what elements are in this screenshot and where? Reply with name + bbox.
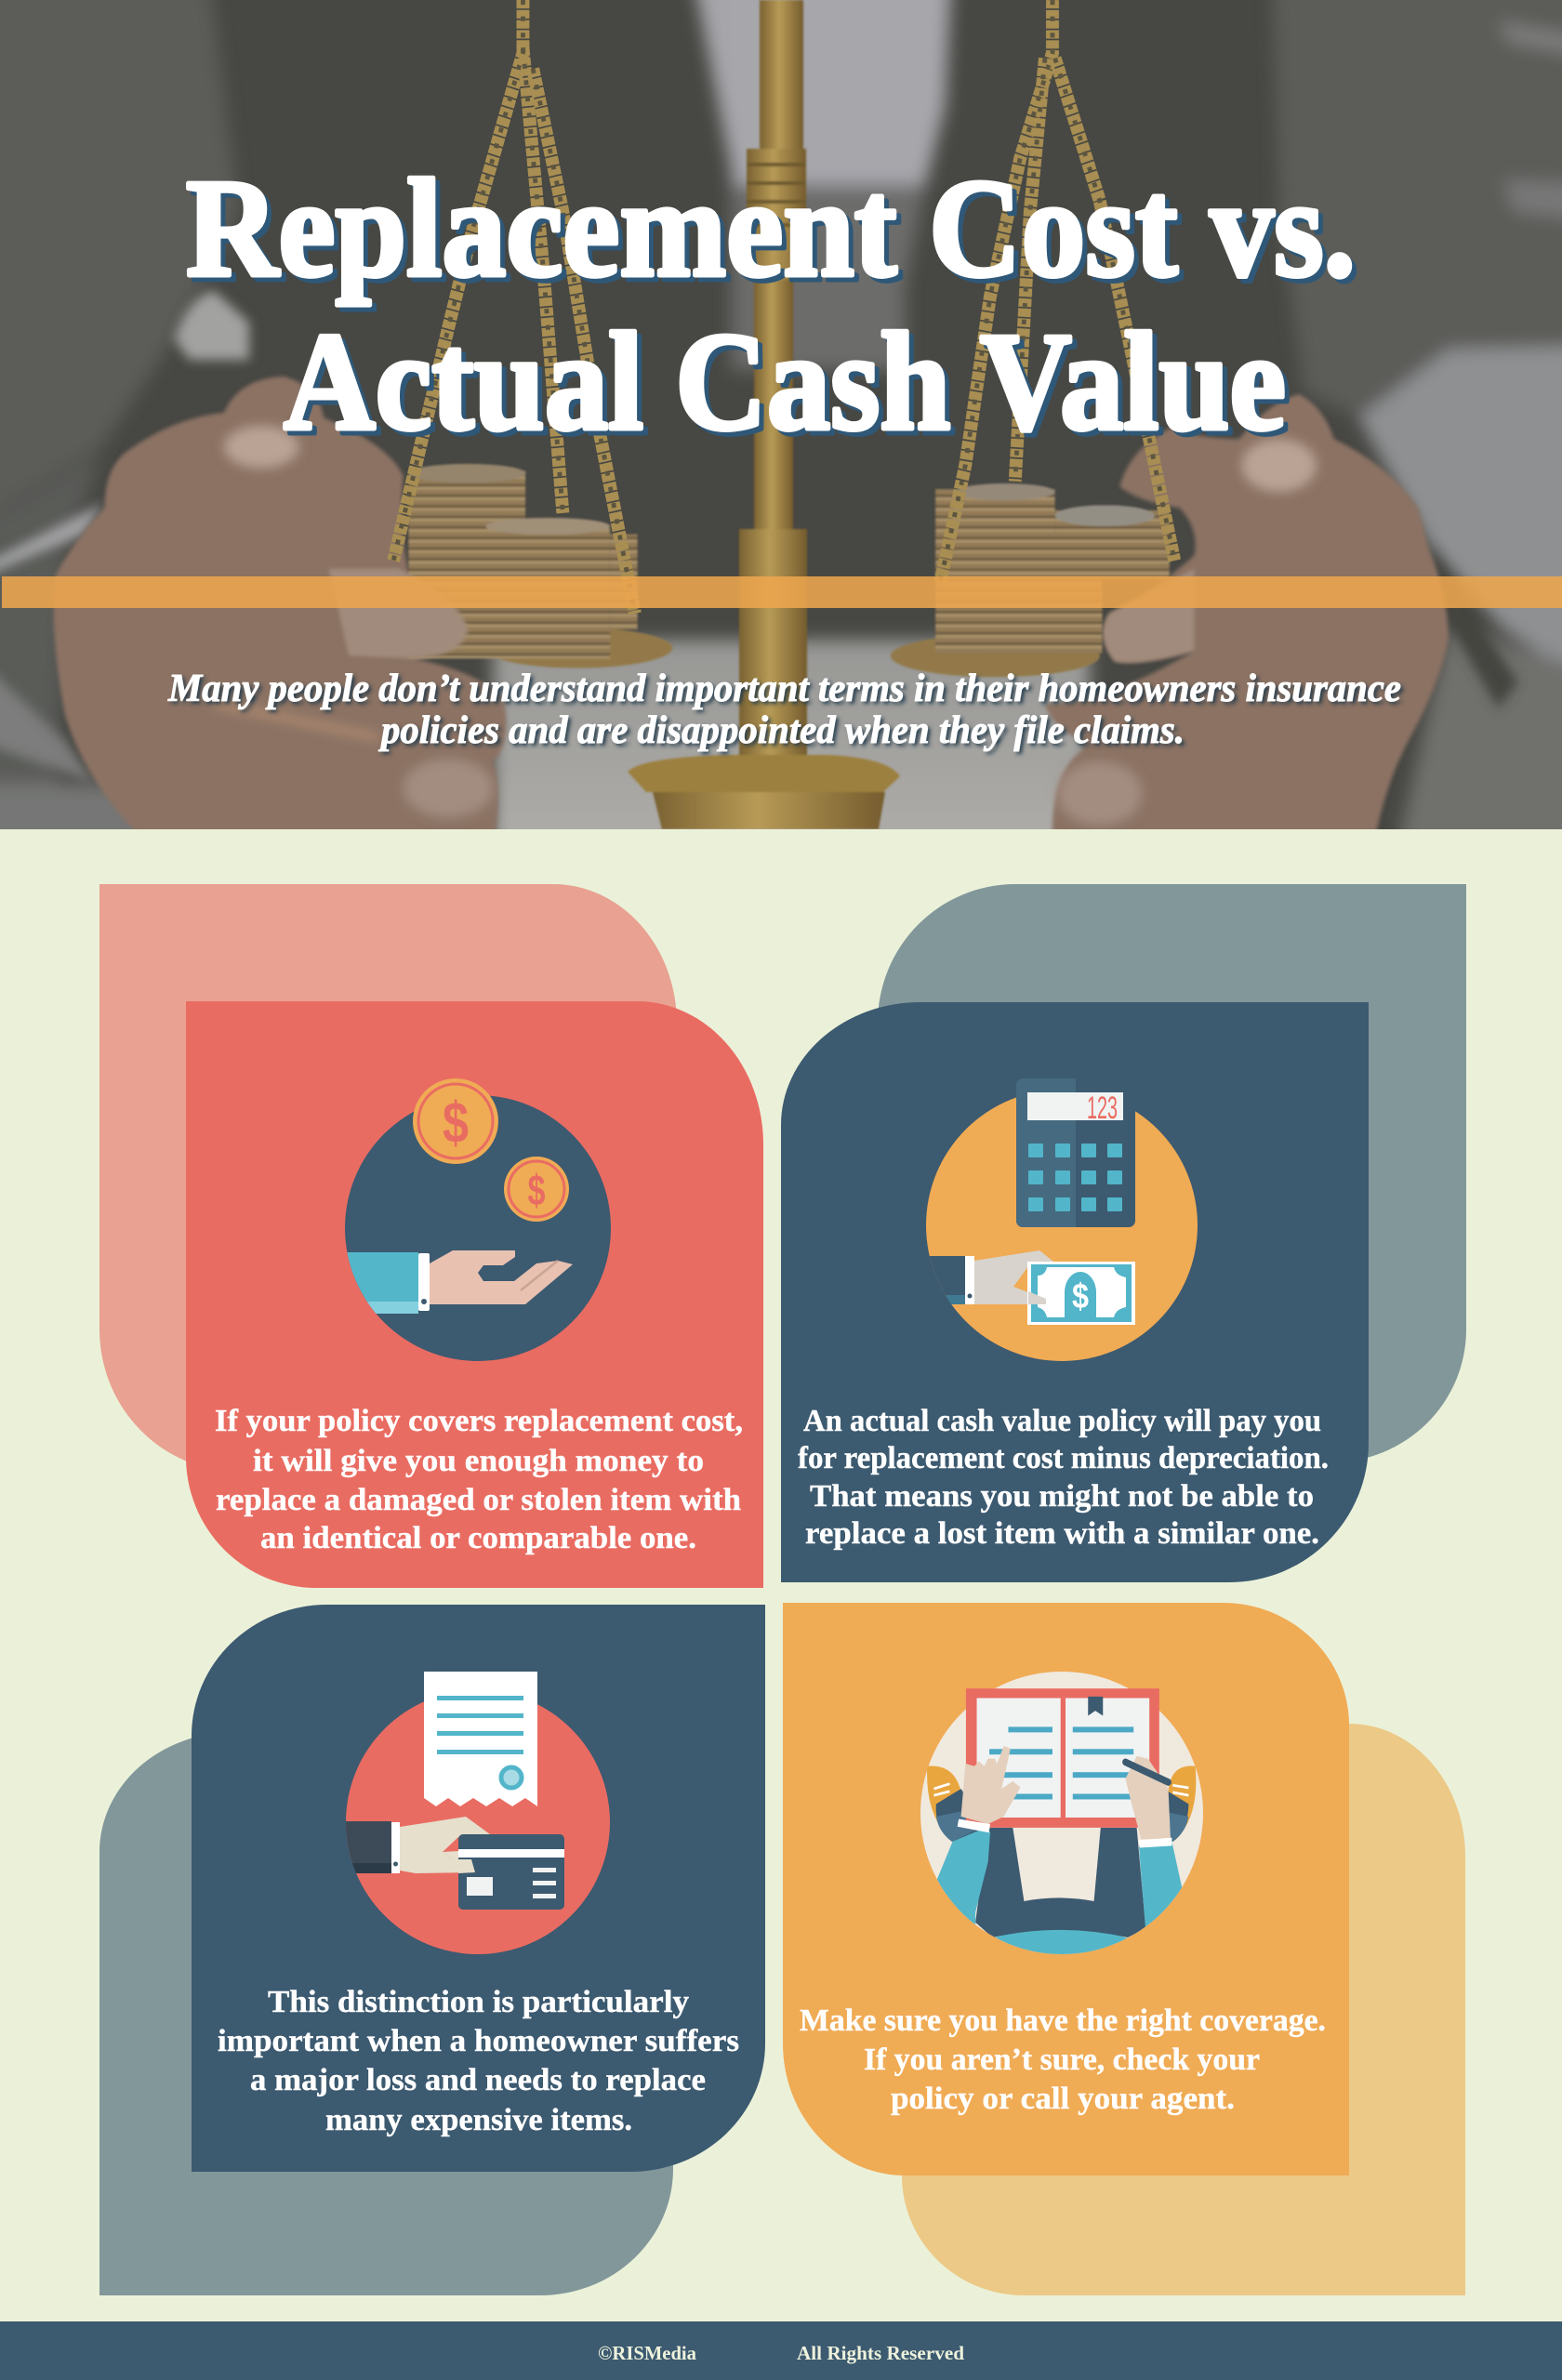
text: replacement cost: it will give you enough money to xyxy=(253,1444,704,1478)
subtitle: Many people don’t understand important terms in their homeowners insurance xyxy=(167,668,1401,710)
panel: right coverage xyxy=(783,1603,1349,2175)
icon: receipt and credit card xyxy=(344,1672,610,1954)
text: actual cash value: replace a lost item with a similar one. xyxy=(805,1516,1319,1551)
fingers overlapping coins xyxy=(329,569,1195,663)
scale column and pedestal xyxy=(628,0,900,829)
title: Replacement Cost vs. xyxy=(191,154,1360,311)
footer xyxy=(0,2321,1562,2380)
text: right coverage xyxy=(800,2003,1326,2116)
subtitle xyxy=(167,668,1404,755)
panel: distinction xyxy=(192,1605,765,2172)
text: right coverage: Make sure you have the right coverage. xyxy=(800,2003,1326,2038)
panel: replacement cost xyxy=(186,1001,763,1588)
scale chains xyxy=(393,0,1174,614)
icon: person reading policy xyxy=(920,1672,1203,2002)
left hand xyxy=(54,377,507,846)
back panel: light red xyxy=(99,884,677,1472)
text: right coverage: policy or call your agent. xyxy=(891,2082,1235,2116)
text: distinction xyxy=(218,1985,739,2137)
text: replacement cost xyxy=(215,1404,743,1555)
title: Actual Cash Value xyxy=(288,308,1291,464)
icon: hand catching coins xyxy=(345,1078,611,1361)
title: Actual Cash Value xyxy=(284,303,1286,459)
icon: hand catching coins: $ xyxy=(443,1091,469,1156)
footer: All Rights Reserved xyxy=(797,2342,964,2364)
text: actual cash value xyxy=(798,1404,1329,1551)
text: actual cash value: That means you might not be able to xyxy=(810,1479,1314,1514)
back panel: light orange xyxy=(902,1724,1465,2295)
back panel: grey-green top right xyxy=(878,884,1466,1462)
footer: ©RISMedia xyxy=(598,2342,696,2364)
back panel: grey-green bottom left xyxy=(99,1732,673,2295)
panel: actual cash value xyxy=(781,1002,1369,1582)
right hand xyxy=(1045,394,1449,846)
text: right coverage: If you aren’t sure, check your xyxy=(864,2043,1260,2077)
text: actual cash value: An actual cash value policy will pay you xyxy=(803,1404,1321,1438)
scale coins and pans xyxy=(408,464,1170,677)
text: replacement cost: an identical or comparable one. xyxy=(260,1521,696,1555)
icon: calculator and cash: $ xyxy=(1072,1277,1089,1316)
text: distinction: This distinction is particularly xyxy=(268,1985,689,2019)
subtitle: policies and are disappointed when they file claims. xyxy=(378,709,1185,752)
title: Replacement Cost vs. xyxy=(186,150,1356,306)
subtitle: policies and are disappointed when they file claims. xyxy=(381,712,1187,755)
text: distinction: a major loss and needs to replace xyxy=(250,2063,706,2097)
text: actual cash value: for replacement cost minus depreciation. xyxy=(798,1441,1329,1475)
subtitle: Many people don’t understand important terms in their homeowners insurance xyxy=(170,670,1404,713)
icon: calculator and cash xyxy=(920,1078,1198,1361)
title xyxy=(186,150,1360,464)
icon: hand catching coins: $ xyxy=(528,1166,545,1214)
hero photo: scales of justice held between hands xyxy=(0,0,1562,829)
icon: calculator and cash: 123 xyxy=(1087,1091,1118,1126)
text: replacement cost: replace a damaged or stolen item with xyxy=(216,1483,741,1517)
text: distinction: many expensive items. xyxy=(325,2103,632,2137)
text: distinction: important when a homeowner suffers xyxy=(218,2024,739,2058)
orange band xyxy=(2,576,1562,608)
text: replacement cost: If your policy covers replacement cost, xyxy=(215,1404,743,1438)
